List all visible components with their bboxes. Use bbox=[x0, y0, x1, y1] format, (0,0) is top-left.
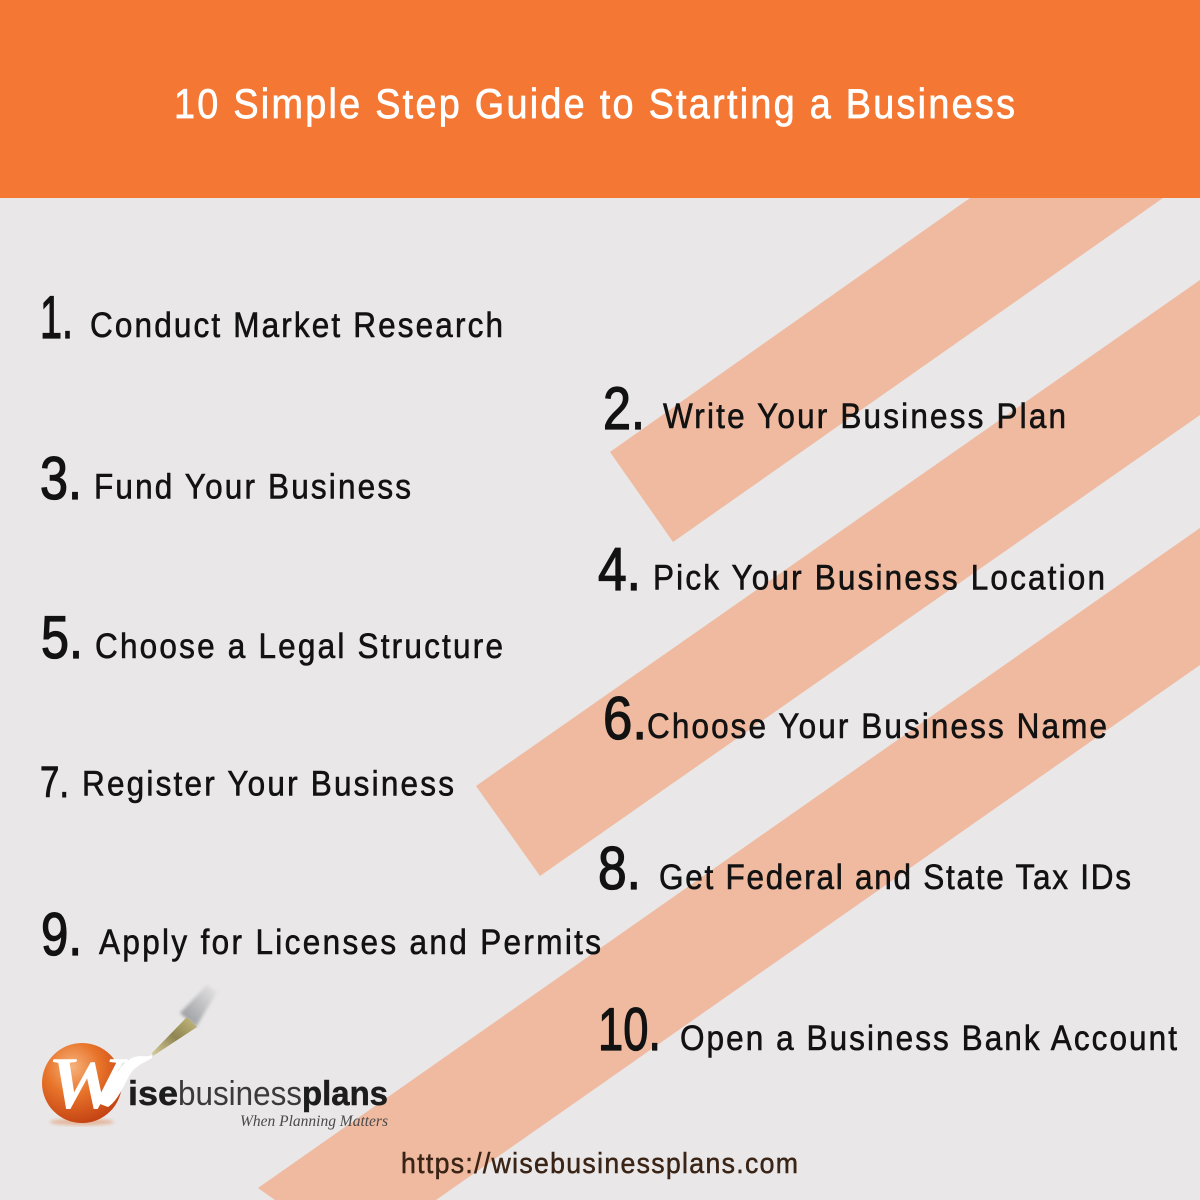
website url: https://wisebusinessplans.com bbox=[401, 1147, 798, 1179]
step 1: 1. bbox=[40, 284, 73, 351]
icon: orange ball with script W and pen: W bbox=[47, 1043, 129, 1125]
step 10: 10. bbox=[598, 996, 661, 1063]
step 3 bbox=[40, 445, 411, 512]
step 3: 3. bbox=[40, 445, 82, 512]
step 9: Apply for Licenses and Permits bbox=[99, 924, 601, 962]
step 7: Register Your Business bbox=[82, 765, 454, 804]
step 9: 9. bbox=[41, 901, 82, 968]
logo tagline: When Planning Matters bbox=[240, 1113, 388, 1130]
logo: Wise Business Plans bbox=[42, 985, 388, 1130]
title: 10 Simple Step Guide to Starting a Business bbox=[174, 81, 1015, 127]
step 6 bbox=[603, 685, 1107, 752]
step 9 bbox=[41, 901, 601, 968]
step 8 bbox=[598, 835, 1131, 902]
step 6: 6. bbox=[603, 685, 647, 752]
step 5: 5. bbox=[41, 604, 83, 671]
logo wordmark: plans bbox=[302, 1075, 388, 1113]
step 1: Conduct Market Research bbox=[90, 307, 503, 345]
icon: orange ball with script W and pen bbox=[42, 985, 217, 1126]
decorative diagonal band: middle bbox=[476, 280, 1200, 876]
step 10 bbox=[598, 996, 1177, 1063]
step 2: 2. bbox=[603, 375, 645, 442]
step 10: Open a Business Bank Account bbox=[680, 1020, 1177, 1058]
step 7: 7. bbox=[40, 758, 69, 807]
decorative diagonal band: bottom bbox=[258, 528, 1200, 1200]
step 6: Choose Your Business Name bbox=[647, 708, 1107, 746]
step 3: Fund Your Business bbox=[94, 468, 411, 507]
step 5: Choose a Legal Structure bbox=[95, 628, 503, 666]
step 4 bbox=[598, 536, 1105, 603]
step 4: 4. bbox=[598, 536, 641, 603]
step 2: Write Your Business Plan bbox=[663, 398, 1066, 436]
decorative diagonal band: top bbox=[610, 198, 1163, 542]
header banner bbox=[0, 0, 1200, 198]
step 5 bbox=[41, 604, 503, 671]
logo wordmark: business bbox=[178, 1075, 302, 1113]
logo wordmark: ise bbox=[128, 1075, 178, 1113]
step 8: Get Federal and State Tax IDs bbox=[659, 859, 1131, 897]
logo wordmark bbox=[128, 1075, 388, 1113]
step 2 bbox=[603, 375, 1066, 442]
step 8: 8. bbox=[598, 835, 641, 902]
step 1 bbox=[40, 284, 503, 351]
step 4: Pick Your Business Location bbox=[653, 559, 1105, 598]
